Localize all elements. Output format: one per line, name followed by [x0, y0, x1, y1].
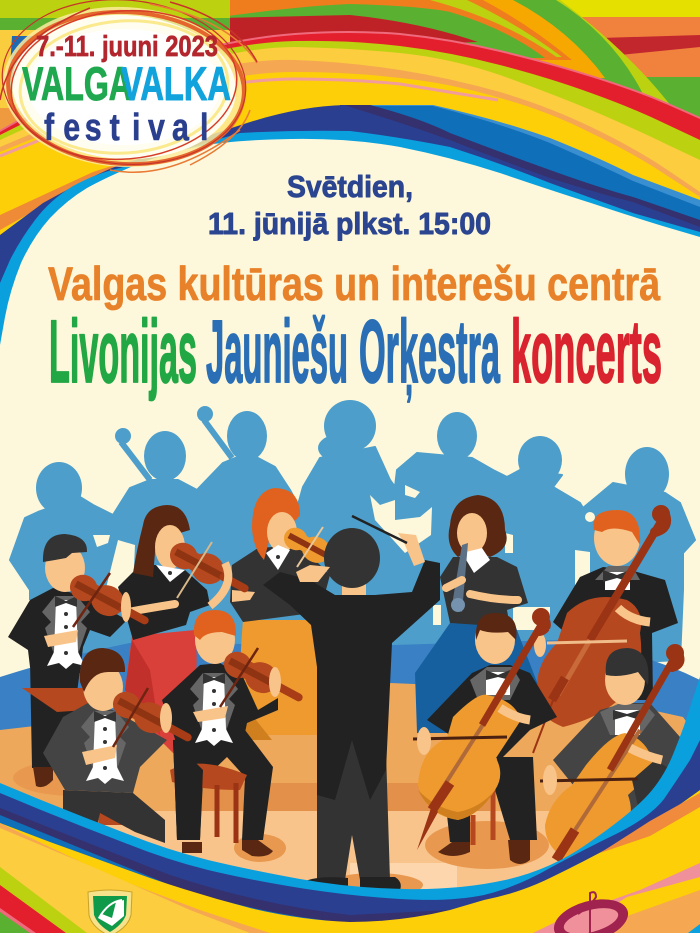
- logo wordmark: VALGA: [22, 57, 132, 110]
- player: seated violinist, front left: [22, 648, 198, 850]
- concert title: [49, 301, 662, 402]
- player: right front cellist: [540, 644, 684, 862]
- logo wordmark: VALKA: [121, 57, 231, 110]
- player: violinist with orange hair: [230, 488, 357, 740]
- festival logo badge: [0, 0, 257, 174]
- logo: treble clef emblem: [549, 892, 633, 933]
- player: violinist in red skirt: [118, 505, 255, 757]
- player: seated violinist, centre left: [162, 610, 309, 856]
- logo date text: 7.-11. juuni 2023: [36, 31, 218, 63]
- date and time text: 11. jūnijā plkst. 15:00: [208, 206, 491, 241]
- player: back cellist: [533, 505, 678, 753]
- silhouette cello scrolls: [115, 406, 232, 480]
- player: left standing violinist: [8, 534, 155, 787]
- background: bottom colour bands: [0, 677, 700, 933]
- concert title: Jauniešu: [206, 301, 348, 401]
- silhouette heads: [36, 400, 669, 514]
- concert title: Livonijas: [49, 301, 197, 401]
- logo festival word: festival: [44, 107, 208, 149]
- date and time text: Svētdien,: [287, 169, 413, 204]
- player: flautist: [415, 495, 540, 733]
- logo: Valga coat of arms shield: [88, 890, 132, 933]
- date and time text: [208, 169, 491, 241]
- orchestra silhouettes: [0, 400, 695, 690]
- stage floor: [0, 640, 700, 933]
- player: front cellist: [413, 608, 557, 864]
- conductor: [263, 516, 440, 890]
